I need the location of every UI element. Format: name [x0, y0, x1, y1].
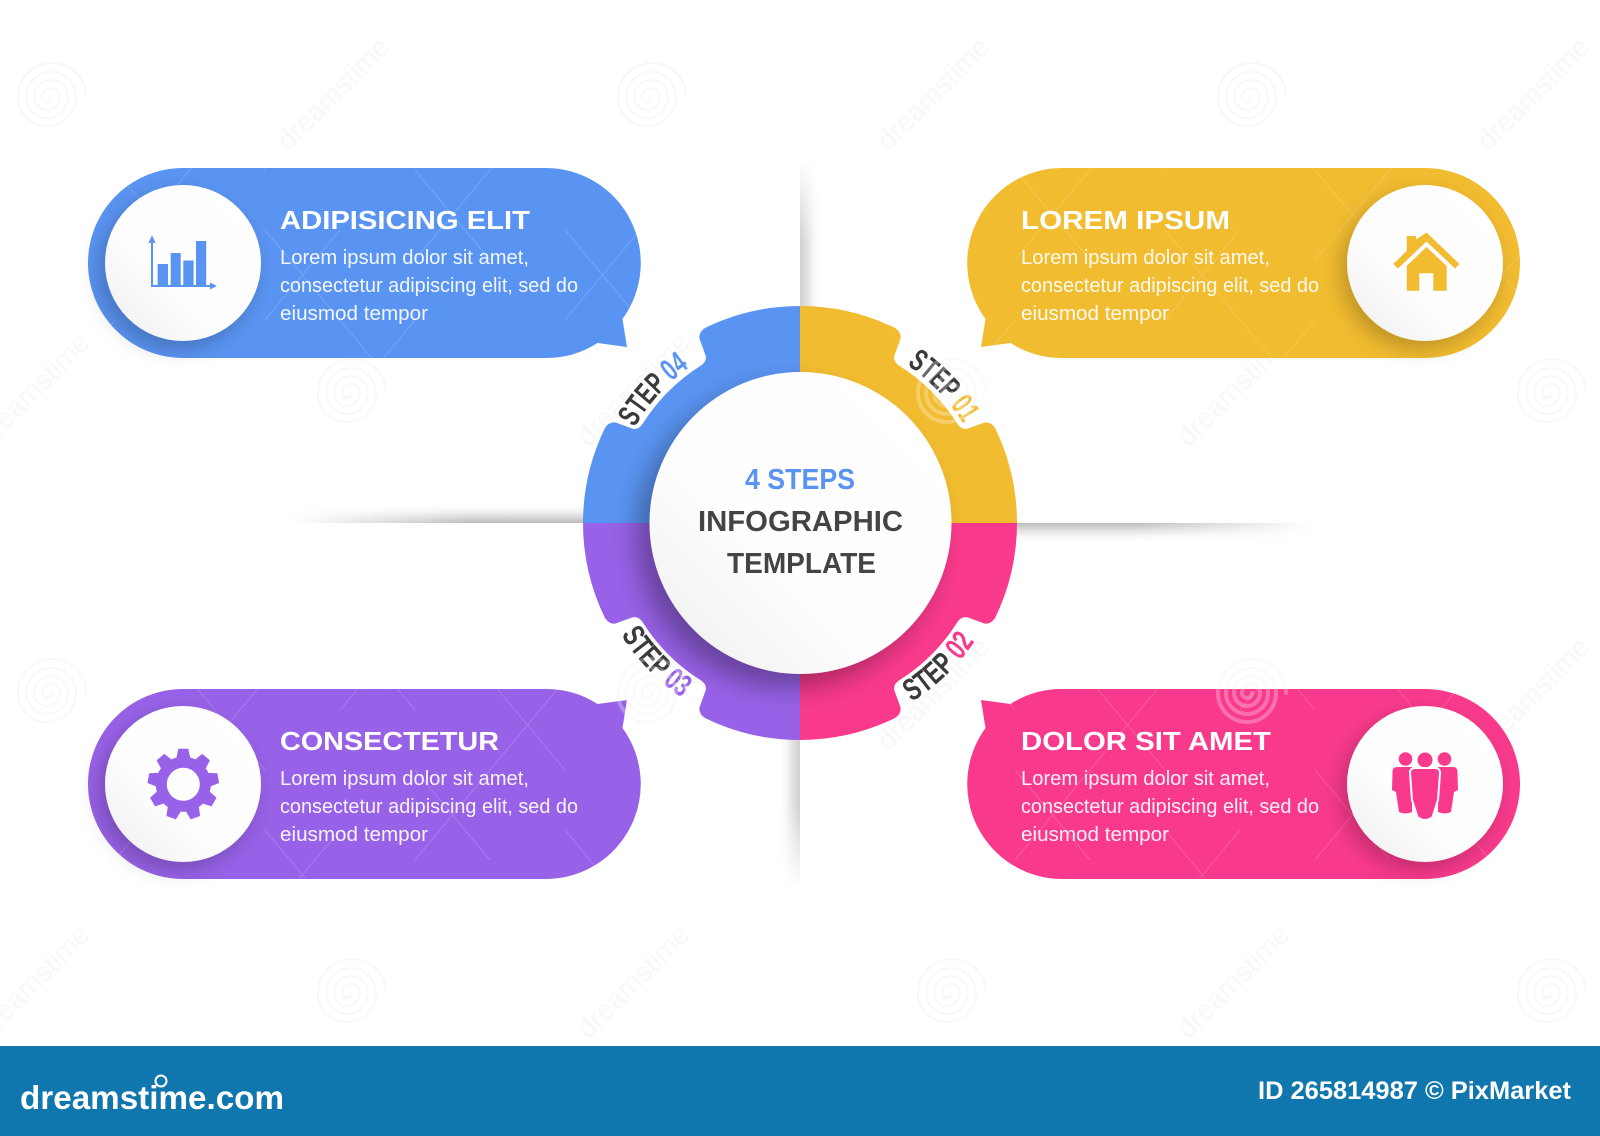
label: step 03: STEP 03	[624, 626, 692, 696]
watermark pattern on background: dreamstime	[870, 631, 996, 756]
fold shadows	[290, 160, 1312, 888]
body text	[1021, 247, 1319, 325]
watermark pattern on background: dreamstime	[570, 919, 696, 1044]
watermark spirals over colour	[618, 359, 1286, 722]
watermark pattern on background: dreamstime	[870, 31, 996, 156]
watermark lines	[88, 168, 641, 358]
segment: step 03 purple	[583, 523, 800, 740]
body text: Lorem ipsum dolor sit amet,	[280, 768, 529, 790]
label: step 01: STEP 01	[910, 350, 979, 423]
body text	[280, 247, 578, 325]
watermark lines	[967, 168, 1520, 358]
logo spiral	[156, 1076, 166, 1086]
panel: lorem ipsum	[967, 168, 1520, 358]
center title	[698, 464, 903, 580]
body text: Lorem ipsum dolor sit amet,	[1021, 768, 1270, 790]
footer bar	[0, 1046, 1600, 1136]
footer logo: dreamstime.com	[20, 1079, 284, 1116]
segment: step 04 blue	[583, 306, 800, 523]
icon: people	[1392, 752, 1458, 820]
4 steps line: 4 STEPS	[745, 464, 855, 496]
icon circle	[1347, 706, 1503, 862]
icon: gear	[147, 749, 219, 820]
panel: consectetur	[88, 689, 641, 879]
body text: consectetur adipiscing elit, sed do	[1021, 275, 1319, 297]
body text: eiusmod tempor	[280, 824, 428, 846]
infographic line: INFOGRAPHIC	[698, 506, 903, 538]
watermark pattern on background: dreamstime	[1170, 919, 1296, 1044]
body text: consectetur adipiscing elit, sed do	[280, 275, 578, 297]
image id credit: ID 265814987 © PixMarket	[1258, 1077, 1572, 1105]
template line: TEMPLATE	[727, 548, 876, 580]
ring of four segments	[583, 306, 1017, 740]
heading: ADIPISICING ELIT	[280, 205, 530, 235]
purple speech bubble	[88, 689, 641, 879]
body text: Lorem ipsum dolor sit amet,	[1021, 247, 1270, 269]
watermark pattern on background: dreamstime	[1170, 327, 1296, 452]
heading: LOREM IPSUM	[1021, 205, 1230, 235]
watermark pattern on background: dreamstime	[570, 327, 696, 452]
body text: Lorem ipsum dolor sit amet,	[280, 247, 529, 269]
body text: consectetur adipiscing elit, sed do	[280, 796, 578, 818]
icon circle	[1347, 185, 1503, 341]
body text: eiusmod tempor	[1021, 303, 1169, 325]
body text: eiusmod tempor	[280, 303, 428, 325]
segment: step 01 yellow	[800, 306, 1017, 523]
heading: DOLOR SIT AMET	[1021, 726, 1271, 756]
watermark pattern on background: dreamstime	[270, 31, 396, 156]
heading: CONSECTETUR	[280, 726, 499, 756]
body text: eiusmod tempor	[1021, 824, 1169, 846]
blue speech bubble	[88, 168, 641, 358]
yellow speech bubble	[967, 168, 1520, 358]
watermark lines	[88, 689, 641, 879]
icon circle	[105, 185, 261, 341]
label: step 02: STEP 02	[902, 632, 974, 700]
label: step 04: STEP 04	[618, 351, 688, 425]
center circle	[650, 372, 952, 674]
body text	[280, 768, 578, 846]
icon: bar chart	[148, 235, 217, 290]
body text	[1021, 768, 1319, 846]
panel: dolor sit amet	[967, 689, 1520, 879]
icon circle	[105, 706, 261, 862]
pink speech bubble	[967, 689, 1520, 879]
icon: house	[1393, 232, 1460, 291]
watermark pattern on background: dreamstime	[1470, 631, 1596, 756]
panel: adipisicing elit	[88, 168, 641, 358]
watermark lines	[967, 689, 1520, 879]
body text: consectetur adipiscing elit, sed do	[1021, 796, 1319, 818]
watermark pattern on background: dreamstime	[1470, 31, 1596, 156]
segment: step 02 pink	[800, 523, 1017, 740]
